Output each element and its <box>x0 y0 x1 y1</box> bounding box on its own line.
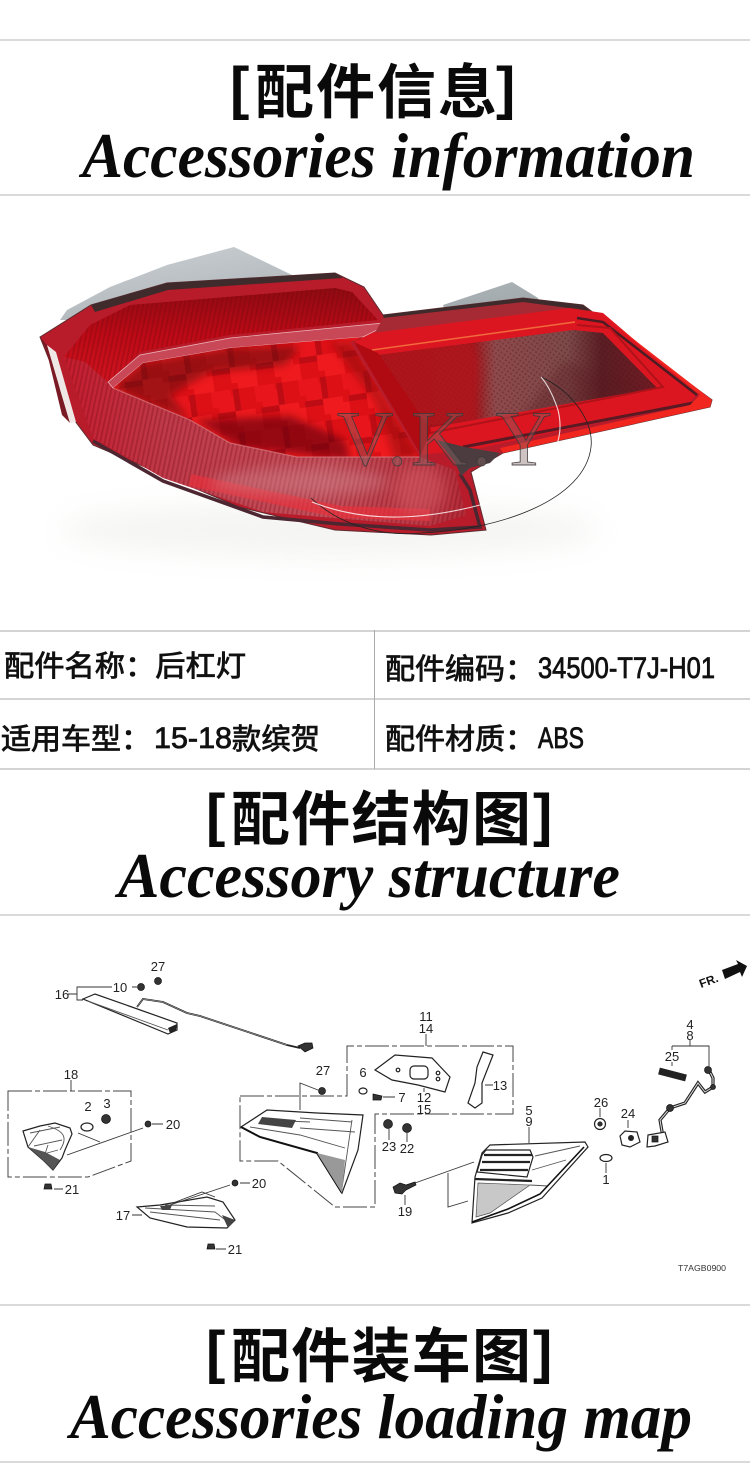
inner tail lamp group <box>240 1034 513 1207</box>
gray lamp housing <box>60 247 545 325</box>
part number labels: 19 <box>398 1204 412 1219</box>
chinese title: [ <box>230 56 249 121</box>
part number labels: 11 <box>419 1009 433 1024</box>
heading: accessories information <box>0 40 750 195</box>
part number labels: 9 <box>525 1114 533 1129</box>
part number labels: 8 <box>686 1028 694 1043</box>
part number labels: 3 <box>103 1096 111 1111</box>
chinese title: ] <box>533 1320 552 1385</box>
chinese title: [ <box>206 783 225 848</box>
part number labels: 21 <box>65 1182 79 1197</box>
divider red <box>354 342 431 455</box>
heading: accessory structure <box>0 783 750 915</box>
orange tip <box>500 313 712 453</box>
part number labels: 6 <box>359 1065 367 1080</box>
english subtitle: Accessories information <box>78 121 695 191</box>
part number labels: 13 <box>493 1078 507 1093</box>
part 17 fog lamp <box>132 1180 250 1249</box>
part number labels: 20 <box>166 1117 180 1132</box>
part number labels: 12 <box>417 1090 431 1105</box>
part code <box>385 652 715 686</box>
fasteners 23 and 22 <box>384 1120 412 1142</box>
cavity lower lip <box>113 388 420 457</box>
part material <box>385 722 584 756</box>
part number labels: 7 <box>398 1090 406 1105</box>
chinese title: 配件结构图 <box>231 787 531 853</box>
chinese title: [ <box>206 1320 225 1385</box>
part number labels: 24 <box>621 1106 635 1121</box>
ground shadow <box>60 504 600 556</box>
part code: 配件编码： <box>385 653 535 686</box>
upper left prism <box>64 288 378 382</box>
white side strip <box>47 345 76 423</box>
product photo: red rear bumper lamp <box>40 247 712 556</box>
part 16 high mount bar and wire <box>68 978 313 1052</box>
lens strip <box>108 323 383 388</box>
part name: 配件名称：后杠灯 <box>4 650 246 683</box>
panel shading <box>380 343 610 427</box>
yellow highlight <box>372 322 575 350</box>
english subtitle: Accessories loading map <box>66 1382 692 1452</box>
part number labels: 16 <box>55 987 69 1002</box>
part number labels: 5 <box>525 1103 533 1118</box>
part number labels: 27 <box>316 1063 330 1078</box>
reflector bricks <box>113 337 420 457</box>
exploded parts diagram <box>8 959 747 1273</box>
lower bright band and pale patch <box>190 464 446 516</box>
part number labels: 25 <box>665 1049 679 1064</box>
gasket <box>375 1055 450 1092</box>
part number labels: 4 <box>686 1017 694 1032</box>
front direction arrow: FR. <box>697 971 720 991</box>
part material: ABS <box>538 722 584 755</box>
right upper band <box>370 302 600 342</box>
chinese title: 配件信息 <box>255 60 497 126</box>
part number labels: 20 <box>252 1176 266 1191</box>
part number labels: 10 <box>113 980 127 995</box>
watermark text: V.K.Y <box>337 395 552 482</box>
bottom dark edge <box>93 441 480 530</box>
right side bulbs and sockets <box>594 1040 716 1173</box>
part number labels: 15 <box>417 1102 431 1117</box>
heading: accessories loading map <box>0 1305 750 1462</box>
part code: 34500-T7J-H01 <box>538 652 715 685</box>
part number labels: 22 <box>400 1141 414 1156</box>
part number labels: 27 <box>151 959 165 974</box>
diagram code: T7AGB0900 <box>678 1264 727 1273</box>
top dark edge <box>91 273 590 320</box>
english subtitle: Accessory structure <box>114 841 620 911</box>
part number labels: 26 <box>594 1095 608 1110</box>
applicable model: 适用车型： <box>1 723 151 756</box>
inner dark frame line <box>577 318 697 395</box>
bracket 13 <box>468 1052 493 1108</box>
part number labels: 17 <box>116 1208 130 1223</box>
part number labels: 2 <box>84 1099 92 1114</box>
part number labels: 21 <box>228 1242 242 1257</box>
mounting bracket dark <box>437 440 500 476</box>
chinese title: 配件装车图 <box>231 1324 531 1390</box>
part number labels: 14 <box>419 1021 433 1036</box>
front direction arrow <box>697 960 747 991</box>
applicable model: 款缤贺 <box>232 723 320 756</box>
dark left side <box>40 337 70 423</box>
chinese title: ] <box>496 56 515 121</box>
applicable model <box>1 722 320 756</box>
part material: 配件材质： <box>385 723 535 756</box>
watermark arcs <box>311 377 591 534</box>
part number labels <box>55 959 694 1257</box>
applicable model: 15-18 <box>154 722 232 755</box>
specification table <box>0 630 750 769</box>
right bright rim <box>354 308 697 455</box>
chinese title: ] <box>533 783 552 848</box>
part 5 9 outer tail lamp <box>393 1127 588 1223</box>
lower prism band <box>64 357 466 526</box>
right reflector panel <box>378 330 657 430</box>
part number labels: 18 <box>64 1067 78 1082</box>
part 18 box and assembly <box>8 1080 163 1189</box>
part number labels: 1 <box>602 1172 610 1187</box>
part number labels: 23 <box>382 1139 396 1154</box>
lamp body <box>40 273 712 535</box>
